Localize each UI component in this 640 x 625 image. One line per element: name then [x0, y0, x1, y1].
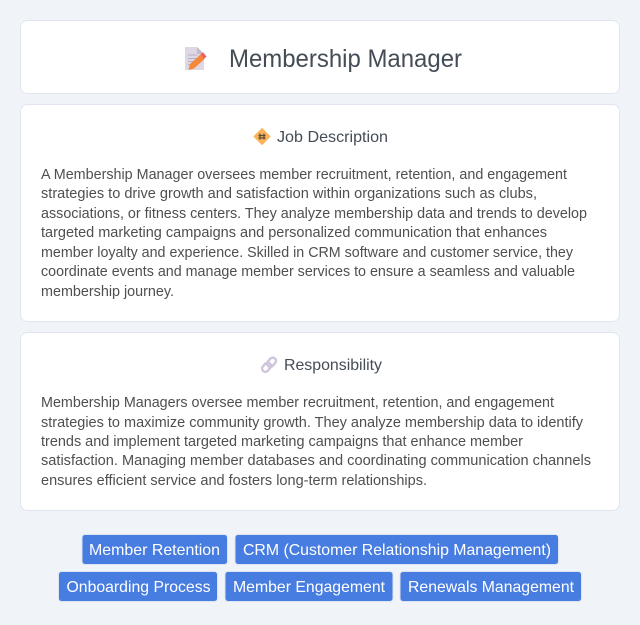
title: Membership Manager	[229, 45, 462, 73]
panel: header	[20, 20, 620, 94]
tags	[58, 534, 582, 602]
tag: member retention: Member Retention	[89, 542, 220, 559]
tag: CRM	[235, 534, 558, 564]
tag: onboarding process: Onboarding Process	[66, 579, 210, 596]
text block: responsibility	[41, 395, 591, 489]
tag: renewals management	[400, 572, 582, 602]
panel: responsibility	[20, 332, 620, 510]
text block: job description: strategies to drive growth and satisfaction within organizations such as clubs,	[41, 186, 537, 202]
text block: responsibility: satisfaction. Managing member databases and coordinating communication channels	[41, 453, 591, 469]
tag: onboarding process	[58, 572, 218, 602]
text block: responsibility: strategies to maximize community growth. They analyze membership data to identify	[41, 415, 584, 431]
heading: responsibility: Responsibility	[284, 357, 382, 374]
text block: responsibility: ensures efficient service and fosters long-term relationships.	[41, 473, 427, 489]
tag: CRM: CRM (Customer Relationship Management)	[243, 542, 551, 559]
text block: job description: coordinate events and manage member services to ensure a seamless and valuable	[41, 264, 575, 280]
text block: job description: targeted marketing campaigns and personalized communication that enhances	[41, 225, 547, 241]
icon: document with pencil	[185, 47, 206, 70]
tag: member engagement	[225, 572, 393, 602]
panel: job description	[20, 104, 620, 322]
text block: responsibility: Membership Managers oversee member recruitment, retention, and engagement	[41, 395, 554, 411]
text block: job description: member loyalty and experience. Skilled in CRM software and customer service, they	[41, 245, 574, 261]
tag: renewals management: Renewals Management	[408, 579, 575, 596]
text block: job description: A Membership Manager oversees member recruitment, retention, and engagement	[41, 167, 567, 183]
text block: job description: membership journey.	[41, 284, 174, 300]
tag: member engagement: Member Engagement	[233, 579, 386, 596]
heading: job description: Job Description	[277, 129, 388, 146]
icon: link	[261, 356, 277, 373]
text block: job description	[41, 167, 587, 300]
text block: responsibility: trends and implement targeted marketing campaigns that enhance member	[41, 434, 523, 450]
text block: job description: associations, or fitness centers. They analyze membership data and trends to develop	[41, 206, 587, 222]
tag: member retention	[82, 534, 228, 564]
icon: orange diamond	[254, 128, 270, 144]
